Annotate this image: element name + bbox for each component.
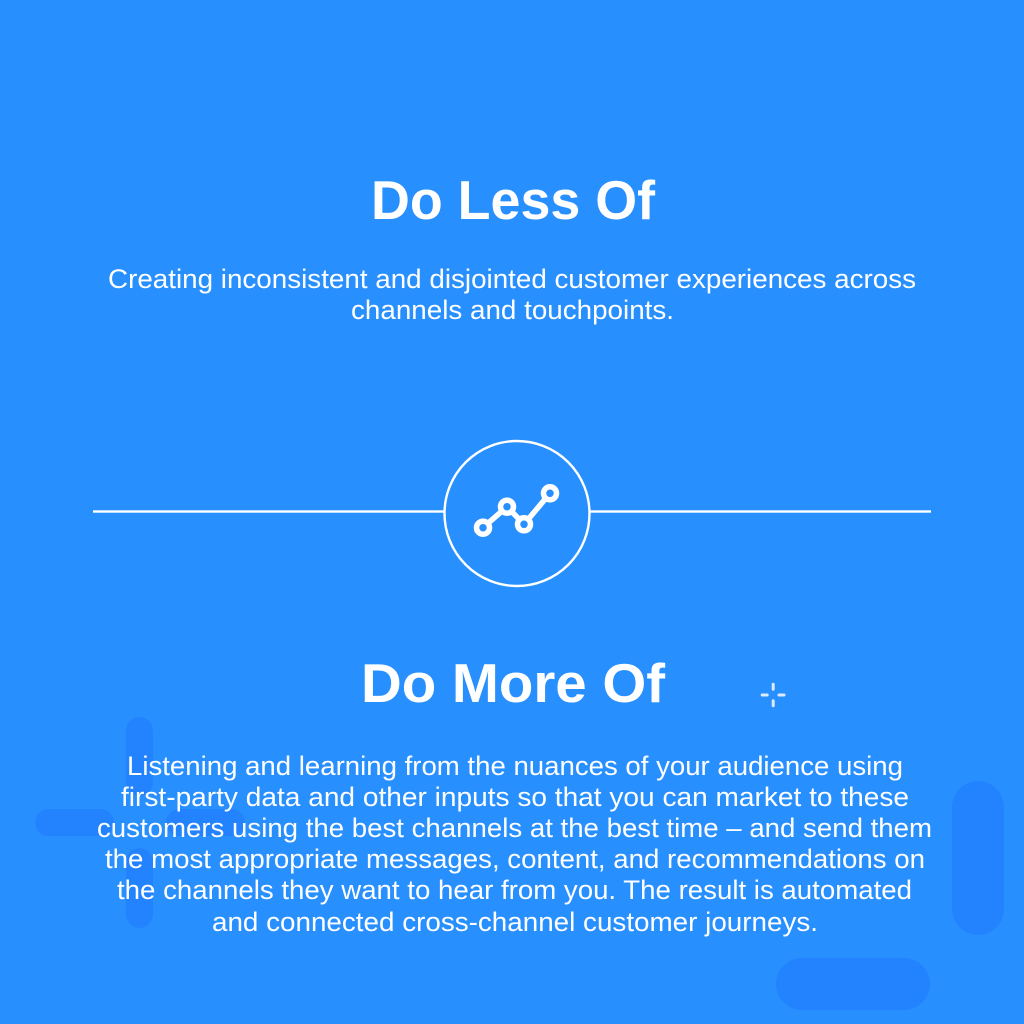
text block: do more description: and connected cross-channel customer journeys. bbox=[212, 907, 818, 937]
text block: do more description bbox=[97, 751, 932, 937]
divider line, right bbox=[589, 510, 931, 513]
decorative plus shape, left bbox=[35, 717, 245, 928]
text block: do more description: Listening and learning from the nuances of your audience using bbox=[127, 751, 903, 781]
decorative pill, bottom horizontal bbox=[776, 958, 930, 1010]
text block: do more description: the channels they want to hear from you. The result is automated bbox=[117, 875, 912, 905]
text block: do less description bbox=[108, 264, 916, 325]
icon: line chart in circle bbox=[444, 441, 590, 586]
text block: do less description: Creating inconsistent and disjointed customer experiences across bbox=[108, 264, 916, 294]
icon: small sparkle cross bbox=[761, 683, 786, 707]
heading: Do Less Of: Do Less Of bbox=[371, 169, 656, 231]
divider line, left bbox=[93, 510, 444, 513]
text block: do less description: channels and touchpoints. bbox=[351, 295, 674, 325]
decorative pill, right vertical bbox=[952, 781, 1004, 935]
text block: do more description: the most appropriate messages, content, and recommendations on bbox=[105, 844, 925, 874]
text block: do more description: first-party data and other inputs so that you can market to these bbox=[121, 782, 909, 812]
text block: do more description: customers using the best channels at the best time – and send them bbox=[97, 813, 932, 843]
heading: Do More Of: Do More Of bbox=[361, 652, 666, 714]
